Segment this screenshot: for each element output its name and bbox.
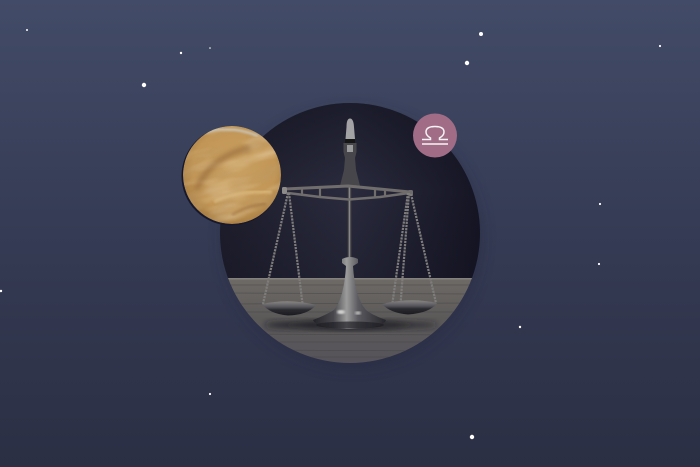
- table shadows: [264, 319, 438, 331]
- base: [313, 257, 386, 329]
- scales: [262, 118, 437, 329]
- finial: [346, 118, 355, 139]
- planet: Venus: [182, 126, 281, 226]
- right pan: [382, 300, 437, 314]
- pillar: [347, 185, 352, 258]
- disc shadow: [222, 108, 482, 368]
- dark wall: [215, 100, 485, 280]
- left pan: [262, 301, 316, 316]
- beam: [285, 186, 410, 200]
- chains: [263, 193, 436, 311]
- photo disc: balance scales on a table: [215, 100, 485, 368]
- wooden table: [228, 278, 472, 363]
- badge: Libra sign: [413, 114, 457, 158]
- neck: [340, 143, 360, 186]
